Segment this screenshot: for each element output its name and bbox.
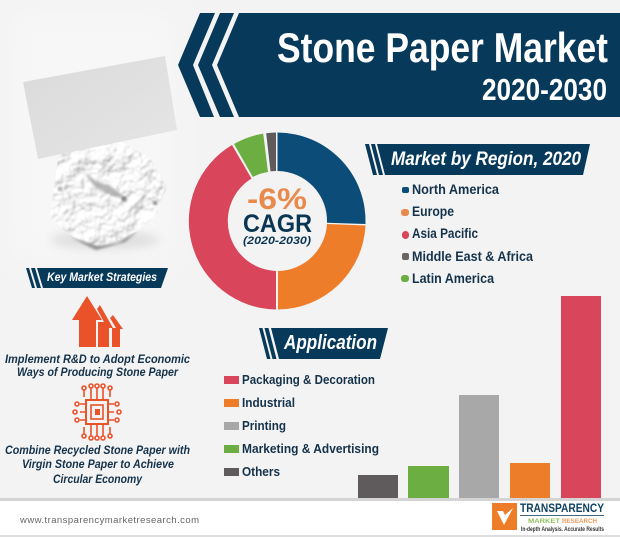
title banner [178, 13, 620, 117]
legend: regions: Latin America [412, 271, 494, 286]
heading: key market strategies: Key Market Strategies [47, 272, 157, 284]
heading: application: Application [283, 332, 377, 354]
CAGR callout: -6% [247, 183, 307, 216]
text: strategy two: Virgin Stone Paper to Achieve [22, 457, 174, 471]
text: strategy two [5, 443, 190, 486]
heading: market by region: Market by Region, 2020 [391, 149, 581, 170]
legend: applications: Marketing & Advertising [242, 441, 379, 456]
text: strategy two: Combine Recycled Stone Paper with [5, 443, 190, 457]
text: strategy one [5, 352, 190, 379]
heading: market by region [365, 144, 590, 175]
CAGR callout [243, 183, 312, 247]
logo: transparency market research: In-depth Analysis. Accurate Results [521, 527, 605, 533]
legend: regions: Asia Pacific [412, 226, 478, 241]
text: strategy one: Implement R&D to Adopt Economic [5, 352, 190, 366]
donut chart: market by region [189, 132, 366, 310]
legend: applications: Packaging & Decoration [242, 372, 375, 387]
legend: regions: Europe [412, 204, 454, 219]
photo: stone and blank paper [23, 56, 177, 250]
logo: transparency market research: RESEARCH [562, 518, 597, 525]
heading: application [259, 328, 388, 359]
text: strategy one: Ways of Producing Stone Paper [17, 365, 179, 379]
legend: applications: Others [242, 464, 280, 479]
text: strategy two: Circular Economy [53, 472, 143, 486]
website url: www.transparencymarketresearch.com [19, 515, 199, 526]
logo: transparency market research [492, 503, 605, 533]
legend: applications: Industrial [242, 395, 295, 410]
logo: transparency market research: TRANSPARENCY [520, 503, 604, 515]
icon: rising arrows [72, 296, 123, 347]
legend: regions [401, 182, 533, 286]
title text [277, 24, 608, 107]
footer band [0, 498, 620, 537]
logo: transparency market research: MARKET [528, 518, 560, 525]
legend: applications: Printing [242, 418, 286, 433]
legend: regions: Middle East & Africa [412, 249, 533, 264]
bar chart: application [358, 296, 601, 500]
CAGR callout: (2020-2030) [243, 235, 311, 247]
legend: regions: North America [412, 182, 499, 197]
CAGR callout: CAGR [243, 210, 312, 238]
heading: key market strategies [26, 268, 168, 288]
icon: circuit chip [73, 384, 121, 440]
legend: applications [224, 372, 379, 479]
